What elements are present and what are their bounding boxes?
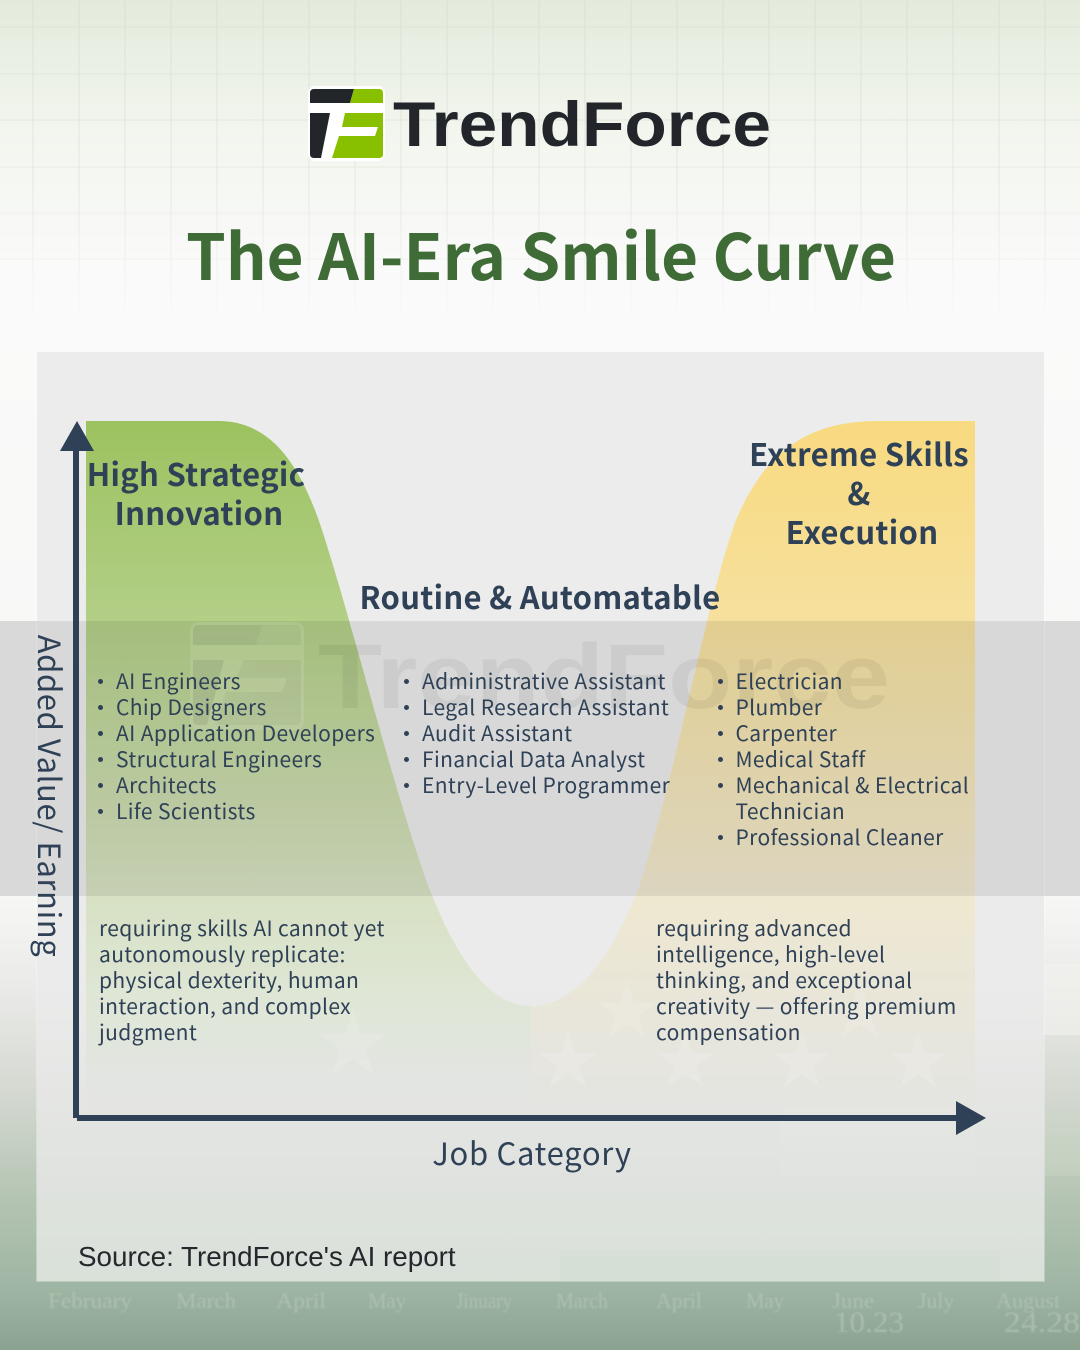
left green area <box>86 421 531 1118</box>
watermark logo <box>190 622 890 730</box>
text: right description <box>656 913 957 1047</box>
list: skilled jobs: Electrician <box>736 666 843 696</box>
list: routine jobs: Administrative Assistant <box>422 666 666 696</box>
x axis arrow <box>77 1101 986 1135</box>
text: left description: judgment <box>99 1017 197 1047</box>
list: strategic jobs: AI Engineers <box>116 666 241 696</box>
list: strategic jobs <box>98 666 375 826</box>
right yellow area <box>531 421 975 1118</box>
background: May <box>746 1288 784 1313</box>
stars <box>319 982 947 1087</box>
heading: high strategic innovation: High Strategic <box>87 450 305 495</box>
background: April <box>656 1288 702 1313</box>
background: February <box>48 1288 132 1313</box>
text: left description: requiring skills AI cannot yet <box>99 913 385 943</box>
heading: extreme skills: Extreme Skills <box>749 430 969 475</box>
x axis label: Job Category <box>432 1129 632 1174</box>
list: strategic jobs: AI Application Developers <box>116 718 375 748</box>
text: right description: creativity — offering premium <box>656 991 957 1021</box>
background: March <box>556 1288 608 1313</box>
text: right description: requiring advanced <box>656 913 852 943</box>
text: right description: intelligence, high-level <box>656 939 885 969</box>
background: Jinuary <box>456 1288 512 1313</box>
list: routine jobs: Audit Assistant <box>422 718 572 748</box>
list: skilled jobs: Plumber <box>736 692 822 722</box>
list: routine jobs: Financial Data Analyst <box>422 744 645 774</box>
list: skilled jobs: Technician <box>736 796 845 826</box>
background: 10.23 <box>834 1306 904 1339</box>
title: The AI-Era Smile Curve <box>186 207 896 299</box>
y axis arrow <box>60 421 94 1118</box>
panel: chart background <box>37 352 1044 1281</box>
text: left description: autonomously replicate: <box>99 939 346 969</box>
text: left description <box>98 913 385 1047</box>
text: right description: compensation <box>656 1017 801 1047</box>
logo mark <box>308 86 385 161</box>
background: July <box>918 1288 954 1313</box>
list: skilled jobs: Mechanical & Electrical <box>736 770 969 800</box>
background: May <box>368 1288 406 1313</box>
heading: high strategic innovation <box>87 450 305 534</box>
list: skilled jobs: Carpenter <box>736 718 837 748</box>
list: skilled jobs: Medical Staff <box>736 744 866 774</box>
logo wordmark: TrendForce <box>393 90 771 160</box>
list: strategic jobs: Structural Engineers <box>116 744 322 774</box>
background: March <box>176 1288 236 1313</box>
list: skilled jobs: Professional Cleaner <box>736 822 944 852</box>
heading: routine: Routine & Automatable <box>359 573 720 618</box>
heading: extreme skills: Execution <box>786 508 938 553</box>
heading: high strategic innovation: Innovation <box>115 489 283 534</box>
text: left description: physical dexterity, human <box>99 965 359 995</box>
heading: extreme skills: & <box>847 469 871 514</box>
text: left description: interaction, and complex <box>99 991 351 1021</box>
logo <box>308 86 771 161</box>
list: routine jobs: Legal Research Assistant <box>422 692 669 722</box>
source: Source: TrendForce's AI report <box>78 1241 456 1272</box>
background: August <box>996 1288 1060 1313</box>
list: routine jobs <box>404 666 670 800</box>
background: June <box>832 1288 874 1313</box>
list: routine jobs: Entry-Level Programmer <box>422 770 670 800</box>
heading: extreme skills <box>749 430 969 553</box>
list: strategic jobs: Architects <box>116 770 217 800</box>
y axis label: Added Value/ Earning <box>29 635 74 957</box>
background: 24.28 <box>1004 1306 1080 1339</box>
list: skilled jobs <box>718 666 969 852</box>
watermark logo: TrendForce <box>318 626 890 728</box>
list: strategic jobs: Chip Designers <box>116 692 267 722</box>
text: right description: thinking, and exceptional <box>656 965 912 995</box>
list: strategic jobs: Life Scientists <box>116 796 256 826</box>
band with watermark <box>0 621 1080 896</box>
background: April <box>276 1288 326 1313</box>
